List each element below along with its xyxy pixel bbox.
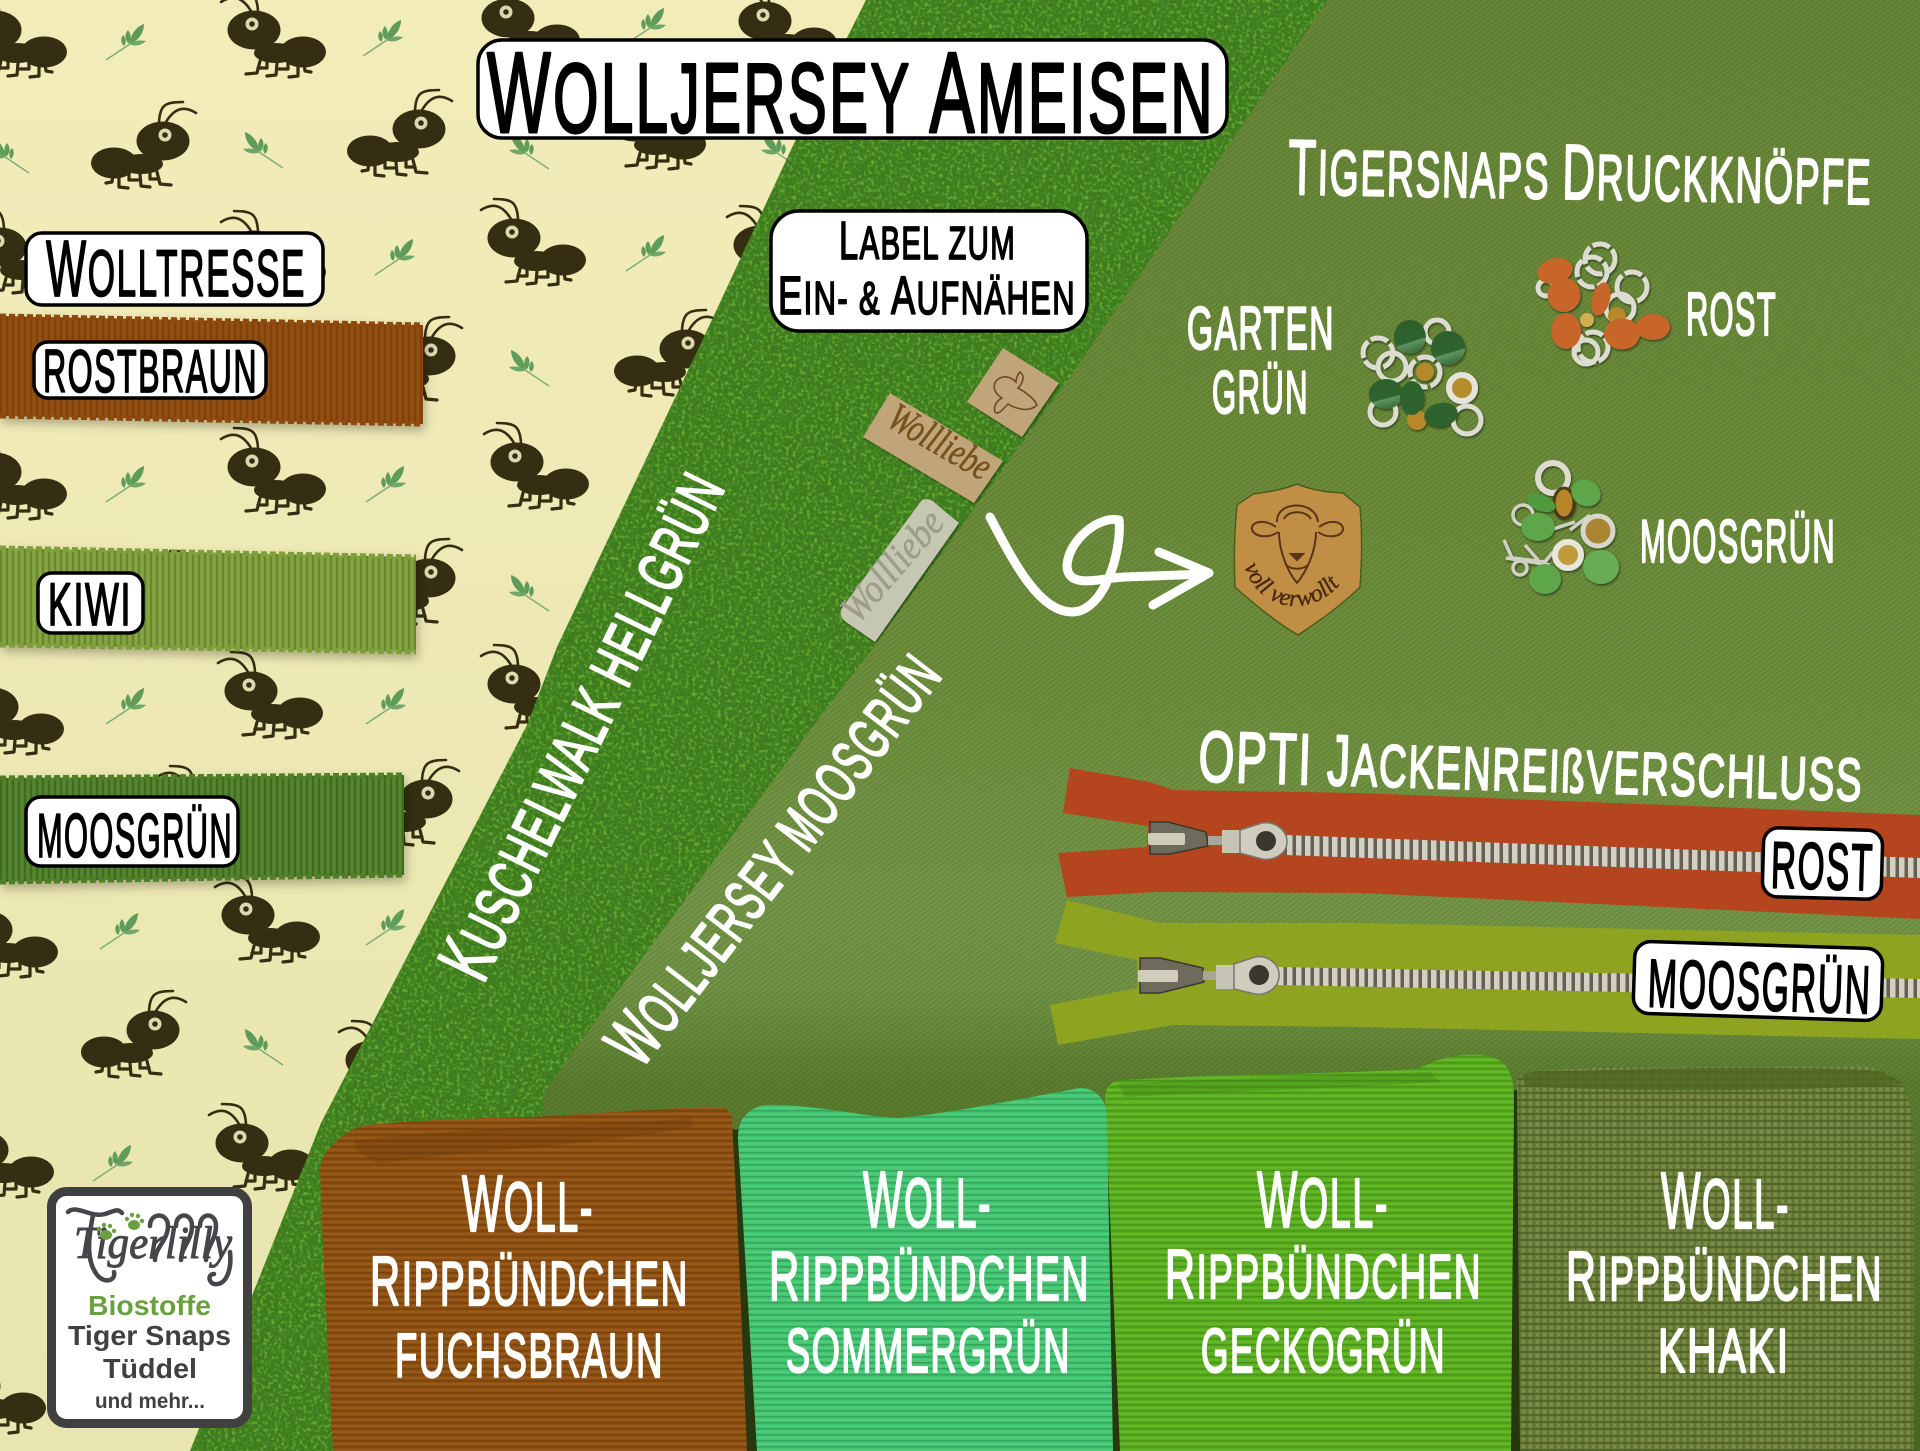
cuff text: WOLL- [863,1155,992,1244]
woven label tags [831,348,1059,642]
snaps cluster: gartengrün [1363,320,1481,434]
tag: Wollliebe grey: Wollliebe [831,500,953,631]
gap shadow behind cuffs [725,1090,1525,1451]
logo text lines: Tiger Snaps [68,1320,231,1351]
logo wordmark [68,1209,233,1284]
cuff text [769,1155,1090,1386]
cuff text [1165,1155,1482,1386]
logo: Tigerlilly Biostoffe [52,1192,248,1424]
zipper pull and stopper [1138,957,1279,994]
cuff text: RIPPBÜNDCHEN [1165,1235,1482,1313]
tag: sheep head [967,348,1059,437]
logo text lines: und mehr... [95,1390,205,1413]
leaf print pattern [0,8,801,1181]
sheep face line art [1252,506,1343,583]
tag: Wollliebe brown [863,393,1003,503]
logo text lines [68,1290,231,1413]
label: Rost zipper [1762,827,1883,905]
tag: Wollliebe brown: Wollliebe [880,394,1000,489]
panel: light green fleece fabric [190,0,1328,1451]
cuff: fuchsbraun [320,1107,747,1451]
cuff text: WOLL- [1661,1156,1790,1245]
ant print pattern [0,0,837,1433]
cuff: sommergrün [738,1088,1113,1451]
label: Kiwi: KIWI [48,571,132,638]
cuff text: GECKOGRÜN [1201,1317,1446,1386]
rotated label: Wolljersey Moosgrün: WOLLJERSEY MOOSGRÜN [590,636,957,1080]
label: Rost snaps: ROST [1686,281,1777,348]
label: zum Ein- und Aufnähen: LABEL ZUM [839,211,1016,271]
cuff text: SOMMERGRÜN [786,1317,1071,1386]
band: Wolltresse rust brown [0,316,423,424]
arrow pointing to leather patch [990,517,1209,612]
panel: moss green wool jersey fabric [500,0,1920,1451]
label: Moosgrün band: MOOSGRÜN [37,802,233,871]
label: Rostbraun: ROSTBRAUN [43,338,258,405]
logo wordmark: Tigerlilly [74,1217,233,1268]
label: Garten Grün snaps [1187,295,1335,426]
band: Wolltresse kiwi [0,548,416,652]
cuff text [1566,1156,1883,1386]
cuff text: RIPPBÜNDCHEN [769,1237,1090,1315]
snaps cluster: rost [1534,244,1670,364]
cuff: khaki [1517,1066,1914,1451]
snaps cluster: moosgrün [1504,463,1619,594]
zipper: rost [1058,768,1920,919]
leather patch: voll verwollt sheep: voll verwollt [1244,562,1340,606]
zipper: moosgrün [1050,900,1920,1045]
logo paws [97,1213,144,1240]
logo text lines: Biostoffe [88,1290,211,1321]
label: Kiwi [38,571,143,638]
logo text lines: Tüddel [103,1353,197,1384]
label: zum Ein- und Aufnähen: EIN- & AUFNÄHEN [778,266,1076,326]
label: Rostbraun [34,338,266,405]
band: Wolltresse moss green [0,775,404,882]
zipper pull and stopper [1148,822,1287,859]
cuff text: FUCHSBRAUN [395,1322,664,1391]
cuff text [370,1159,689,1391]
cuff: geckogrün [1105,1055,1514,1451]
rotated label: Kuschelwalk Hellgrün: KUSCHELWALK HELLGRÜN [422,456,742,992]
title: WOLLJERSEY AMEISEN [487,30,1215,157]
label: Garten Grün snaps: GARTEN [1187,295,1335,362]
label: Moosgrün band [26,797,238,871]
label: Garten Grün snaps: GRÜN [1212,359,1309,426]
label: Wolltresse heading [26,224,323,313]
label: zum Ein- und Aufnähen [771,211,1087,331]
cuff text: WOLL- [1257,1155,1389,1244]
cuff text: KHAKI [1658,1317,1790,1386]
cuff text: WOLL- [462,1159,594,1248]
leather patch: voll verwollt sheep [1234,483,1362,636]
label: Wolltresse heading: WOLLTRESSE [46,224,306,313]
cuff text: RIPPBÜNDCHEN [370,1242,689,1320]
